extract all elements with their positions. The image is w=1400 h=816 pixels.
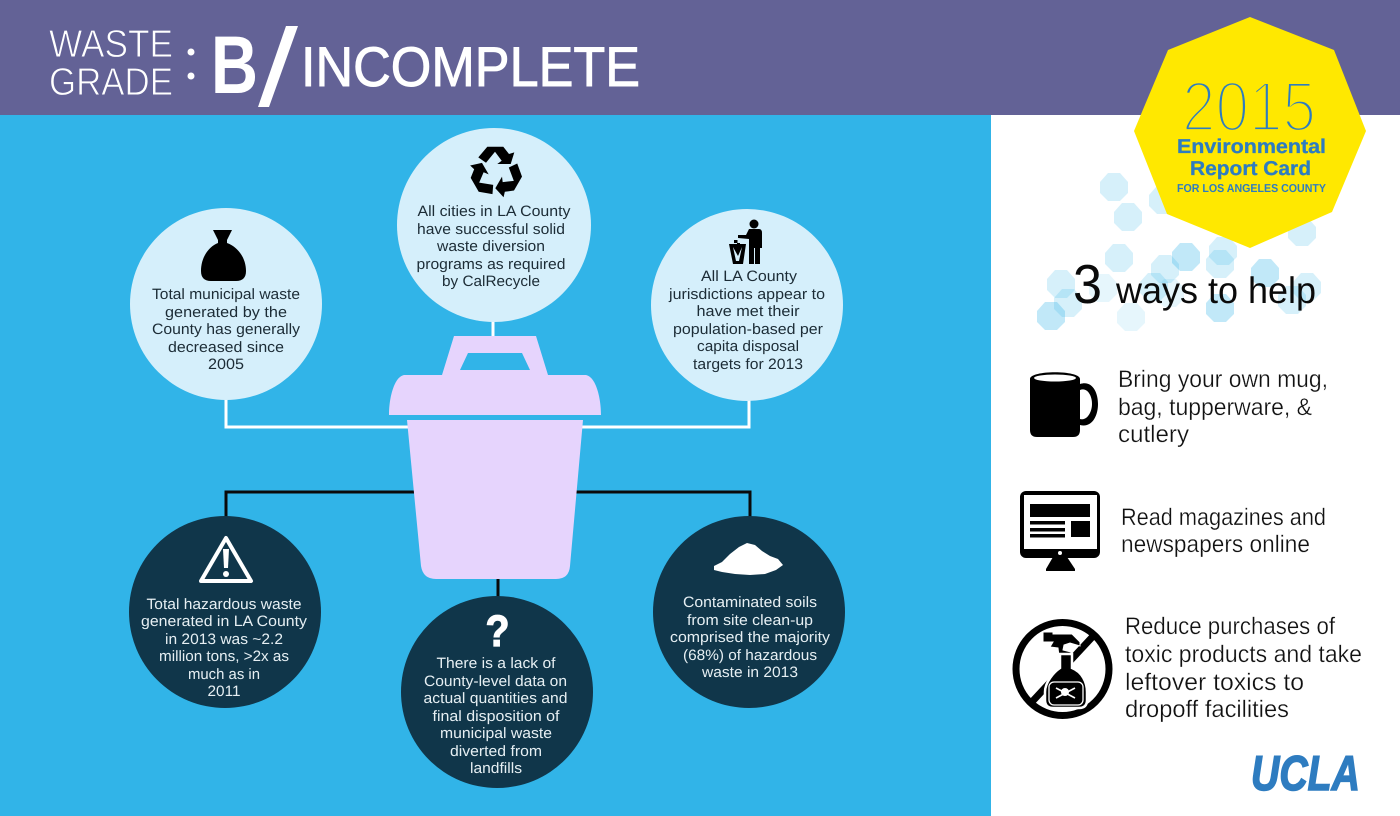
heading: 3 ways to help: ways to help bbox=[1115, 270, 1316, 311]
icon: no toxic spray bbox=[1016, 622, 1109, 716]
circle: contaminated soils bbox=[653, 516, 845, 708]
circle: municipal waste: generated by the bbox=[165, 304, 287, 321]
icon: mug bbox=[1030, 372, 1098, 437]
circle: contaminated soils: comprised the majority bbox=[670, 629, 831, 646]
circle: lack of data bbox=[401, 596, 593, 788]
icon: recycle bbox=[465, 147, 527, 200]
item: mug: cutlery bbox=[1118, 421, 1189, 448]
connectors: black bbox=[226, 492, 750, 600]
item: mug: Bring your own mug, bbox=[1118, 366, 1328, 393]
circle: lack of data: actual quantities and bbox=[424, 690, 568, 707]
circle: contaminated soils: from site clean-up bbox=[687, 612, 813, 629]
circle: diversion programs: have successful solid bbox=[417, 221, 565, 238]
circle: lack of data: municipal waste bbox=[440, 725, 552, 742]
item: toxics: toxic products and take bbox=[1125, 641, 1362, 668]
circle: contaminated soils: (68%) of hazardous bbox=[683, 647, 817, 664]
badge: 2015 Environmental Report Card: 2015 bbox=[1182, 68, 1316, 147]
circle: disposal targets: jurisdictions appear to bbox=[668, 286, 825, 303]
circle: municipal waste bbox=[130, 208, 322, 400]
icon: warning triangle bbox=[201, 538, 251, 581]
circle: contaminated soils: Contaminated soils bbox=[683, 594, 817, 611]
item: online reading: Read magazines and bbox=[1121, 504, 1326, 531]
badge: 2015 Environmental Report Card: FOR LOS ANGELES COUNTY bbox=[1177, 183, 1326, 195]
icon: person using bin bbox=[729, 220, 762, 264]
circle: hazardous waste bbox=[129, 516, 321, 708]
badge: 2015 Environmental Report Card: Environmental bbox=[1177, 136, 1326, 158]
item: toxics: leftover toxics to bbox=[1125, 669, 1304, 696]
icon: garbage bag bbox=[201, 230, 246, 281]
icon: monitor bbox=[1020, 491, 1100, 571]
circle: disposal targets bbox=[651, 209, 843, 401]
logo: UCLA: UCLA bbox=[1251, 747, 1360, 801]
circle: hazardous waste: much as in bbox=[188, 666, 260, 683]
circle: contaminated soils: waste in 2013 bbox=[701, 664, 798, 681]
badge: 2015 Environmental Report Card: Report Card bbox=[1190, 158, 1311, 180]
circle: lack of data: diverted from bbox=[450, 743, 542, 760]
heading: 3 ways to help bbox=[1073, 253, 1316, 315]
title: INCOMPLETE bbox=[301, 35, 640, 98]
circle: hazardous waste: million tons, >2x as bbox=[159, 648, 289, 665]
circle: disposal targets: capita disposal bbox=[697, 338, 799, 355]
circle: hazardous waste: generated in LA County bbox=[141, 613, 308, 630]
circle: disposal targets: targets for 2013 bbox=[693, 356, 803, 373]
circle: lack of data: landfills bbox=[470, 760, 522, 777]
circle: hazardous waste: in 2013 was ~2.2 bbox=[165, 631, 283, 648]
item: mug bbox=[1030, 366, 1328, 448]
circle: municipal waste: 2005 bbox=[208, 356, 244, 373]
blue main panel bbox=[0, 115, 991, 816]
background bubbles bbox=[1037, 173, 1321, 331]
title bbox=[49, 20, 640, 111]
circle: hazardous waste: Total hazardous waste bbox=[146, 596, 302, 613]
title: GRADE bbox=[49, 61, 173, 104]
badge: 2015 Environmental Report Card bbox=[1134, 17, 1366, 248]
item: online reading: newspapers online bbox=[1121, 531, 1310, 558]
trash can bbox=[389, 336, 601, 579]
circle: diversion programs: All cities in LA County bbox=[418, 203, 571, 220]
circle: disposal targets: All LA County bbox=[701, 268, 798, 285]
item: online reading bbox=[1020, 491, 1326, 571]
circle: municipal waste: decreased since bbox=[168, 339, 284, 356]
heading: 3 ways to help: 3 bbox=[1073, 253, 1102, 315]
item: toxics: dropoff facilities bbox=[1125, 696, 1289, 723]
circle: municipal waste: County has generally bbox=[152, 321, 301, 338]
circle: diversion programs: programs as required bbox=[416, 256, 566, 273]
connectors: white bbox=[226, 315, 749, 427]
circle: hazardous waste: 2011 bbox=[208, 683, 240, 700]
header band bbox=[0, 0, 1400, 115]
icon: soil pile bbox=[714, 543, 783, 575]
title: WASTE bbox=[49, 23, 173, 66]
circle: diversion programs bbox=[397, 128, 591, 322]
item: toxics: Reduce purchases of bbox=[1125, 613, 1335, 640]
circle: diversion programs: by CalRecycle bbox=[442, 273, 540, 290]
circle: lack of data: County-level data on bbox=[424, 673, 567, 690]
circle: disposal targets: have met their bbox=[696, 303, 800, 320]
item: toxics bbox=[1016, 613, 1362, 723]
circle: municipal waste: Total municipal waste bbox=[152, 286, 300, 303]
circle: diversion programs: waste diversion bbox=[436, 238, 545, 255]
circle: lack of data: There is a lack of bbox=[436, 655, 556, 672]
icon: question mark: ? bbox=[486, 607, 510, 656]
item: mug: bag, tupperware, & bbox=[1118, 394, 1312, 421]
title: B bbox=[211, 20, 258, 111]
circle: lack of data: final disposition of bbox=[432, 708, 560, 725]
circle: disposal targets: population-based per bbox=[673, 321, 823, 338]
